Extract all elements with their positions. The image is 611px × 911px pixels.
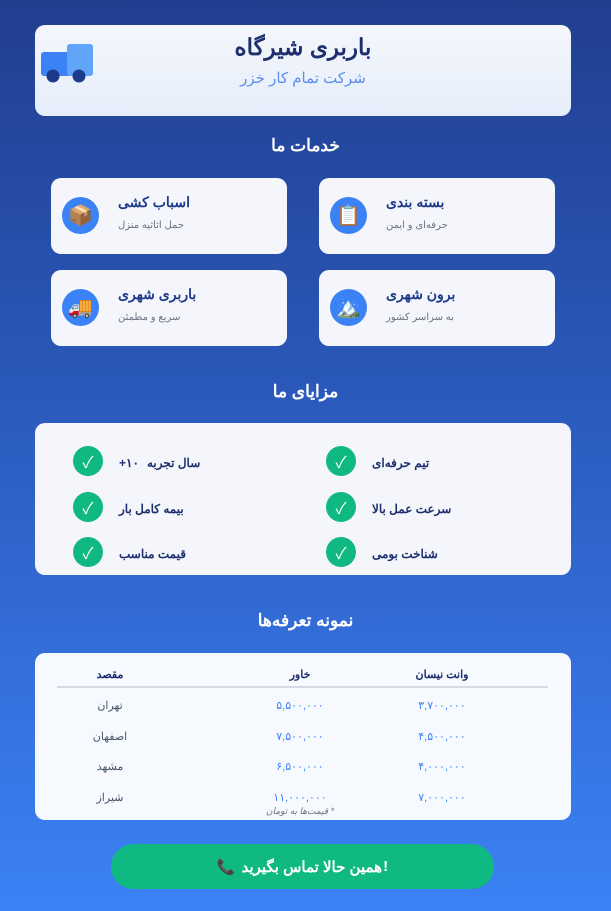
panel: advantages: سرعت عمل بالا — [372, 502, 451, 516]
panel: advantages: +۱۰ — [119, 456, 139, 470]
table: tariffs: ۴,۰۰۰,۰۰۰ — [418, 761, 466, 773]
panel: advantages: ✓ — [336, 501, 346, 518]
panel: advantages: سال تجربه — [147, 456, 200, 470]
service: city freight — [51, 270, 287, 346]
panel: advantages: ✓ — [83, 546, 93, 563]
table: tariffs: ۵,۵۰۰,۰۰۰ — [276, 700, 324, 712]
panel: advantages: شناخت بومی — [372, 547, 438, 561]
service: moving: حمل اثاثیه منزل — [118, 220, 184, 231]
button: call: 📞 — [217, 858, 236, 876]
service: intercity: 🏔️ — [336, 297, 361, 319]
service: moving: 📦 — [68, 205, 93, 227]
panel: advantages: تیم حرفه‌ای — [372, 456, 429, 470]
service: moving: اسباب کشی — [118, 194, 190, 210]
table: tariffs: خاور — [290, 669, 310, 681]
panel: advantages: ✓ — [336, 546, 346, 563]
heading: tariffs: نمونه تعرفه‌ها — [258, 611, 353, 630]
title: باربری شیرگاه — [235, 34, 371, 60]
service: packing — [319, 178, 555, 254]
table: tariffs: تهران — [97, 700, 123, 712]
table: tariffs: ۶,۵۰۰,۰۰۰ — [276, 761, 324, 773]
service: intercity: برون شهری — [386, 286, 455, 302]
button: call: همین حالا تماس بگیرید — [242, 858, 382, 876]
service: city freight: باربری شهری — [118, 286, 196, 302]
table: tariffs: مقصد — [97, 669, 123, 681]
panel: advantages: ✓ — [336, 455, 346, 472]
table: tariffs: مشهد — [97, 761, 123, 773]
service: packing: بسته بندی — [386, 194, 444, 210]
button: call — [111, 844, 494, 889]
panel: advantages: ✓ — [83, 501, 93, 518]
heading: advantages: مزایای ما — [273, 382, 338, 401]
service: moving — [51, 178, 287, 254]
service: packing: 📋 — [336, 205, 361, 227]
subtitle: شرکت تمام کار خزر — [240, 70, 366, 87]
panel: advantages: بیمه کامل بار — [119, 502, 184, 516]
table: tariffs: ۷,۰۰۰,۰۰۰ — [418, 792, 466, 804]
table: tariffs: ۱۱,۰۰۰,۰۰۰ — [273, 792, 327, 804]
table: tariffs: ۷,۵۰۰,۰۰۰ — [276, 731, 324, 743]
icon: truck — [41, 44, 93, 82]
service: city freight: 🚚 — [68, 297, 93, 319]
table: tariffs: وانت نیسان — [416, 669, 468, 681]
header card — [35, 25, 571, 116]
table: tariffs: اصفهان — [93, 731, 127, 743]
heading: services: خدمات ما — [271, 136, 340, 155]
table: tariffs: شیراز — [96, 792, 123, 804]
service: intercity — [319, 270, 555, 346]
table: tariffs: ۳,۷۰۰,۰۰۰ — [418, 700, 466, 712]
service: city freight: سریع و مطمئن — [118, 312, 180, 323]
table: tariffs — [35, 653, 571, 820]
service: intercity: به سراسر کشور — [386, 312, 454, 323]
panel: advantages — [35, 423, 571, 575]
panel: services — [51, 178, 555, 346]
service: packing: حرفه‌ای و ایمن — [386, 220, 448, 231]
panel: advantages: قیمت مناسب — [119, 547, 186, 561]
table: tariffs: ۴,۵۰۰,۰۰۰ — [418, 731, 466, 743]
footnote: * قیمت‌ها به تومان — [266, 806, 334, 816]
panel: advantages: ✓ — [83, 455, 93, 472]
button: call: ! — [383, 858, 388, 875]
